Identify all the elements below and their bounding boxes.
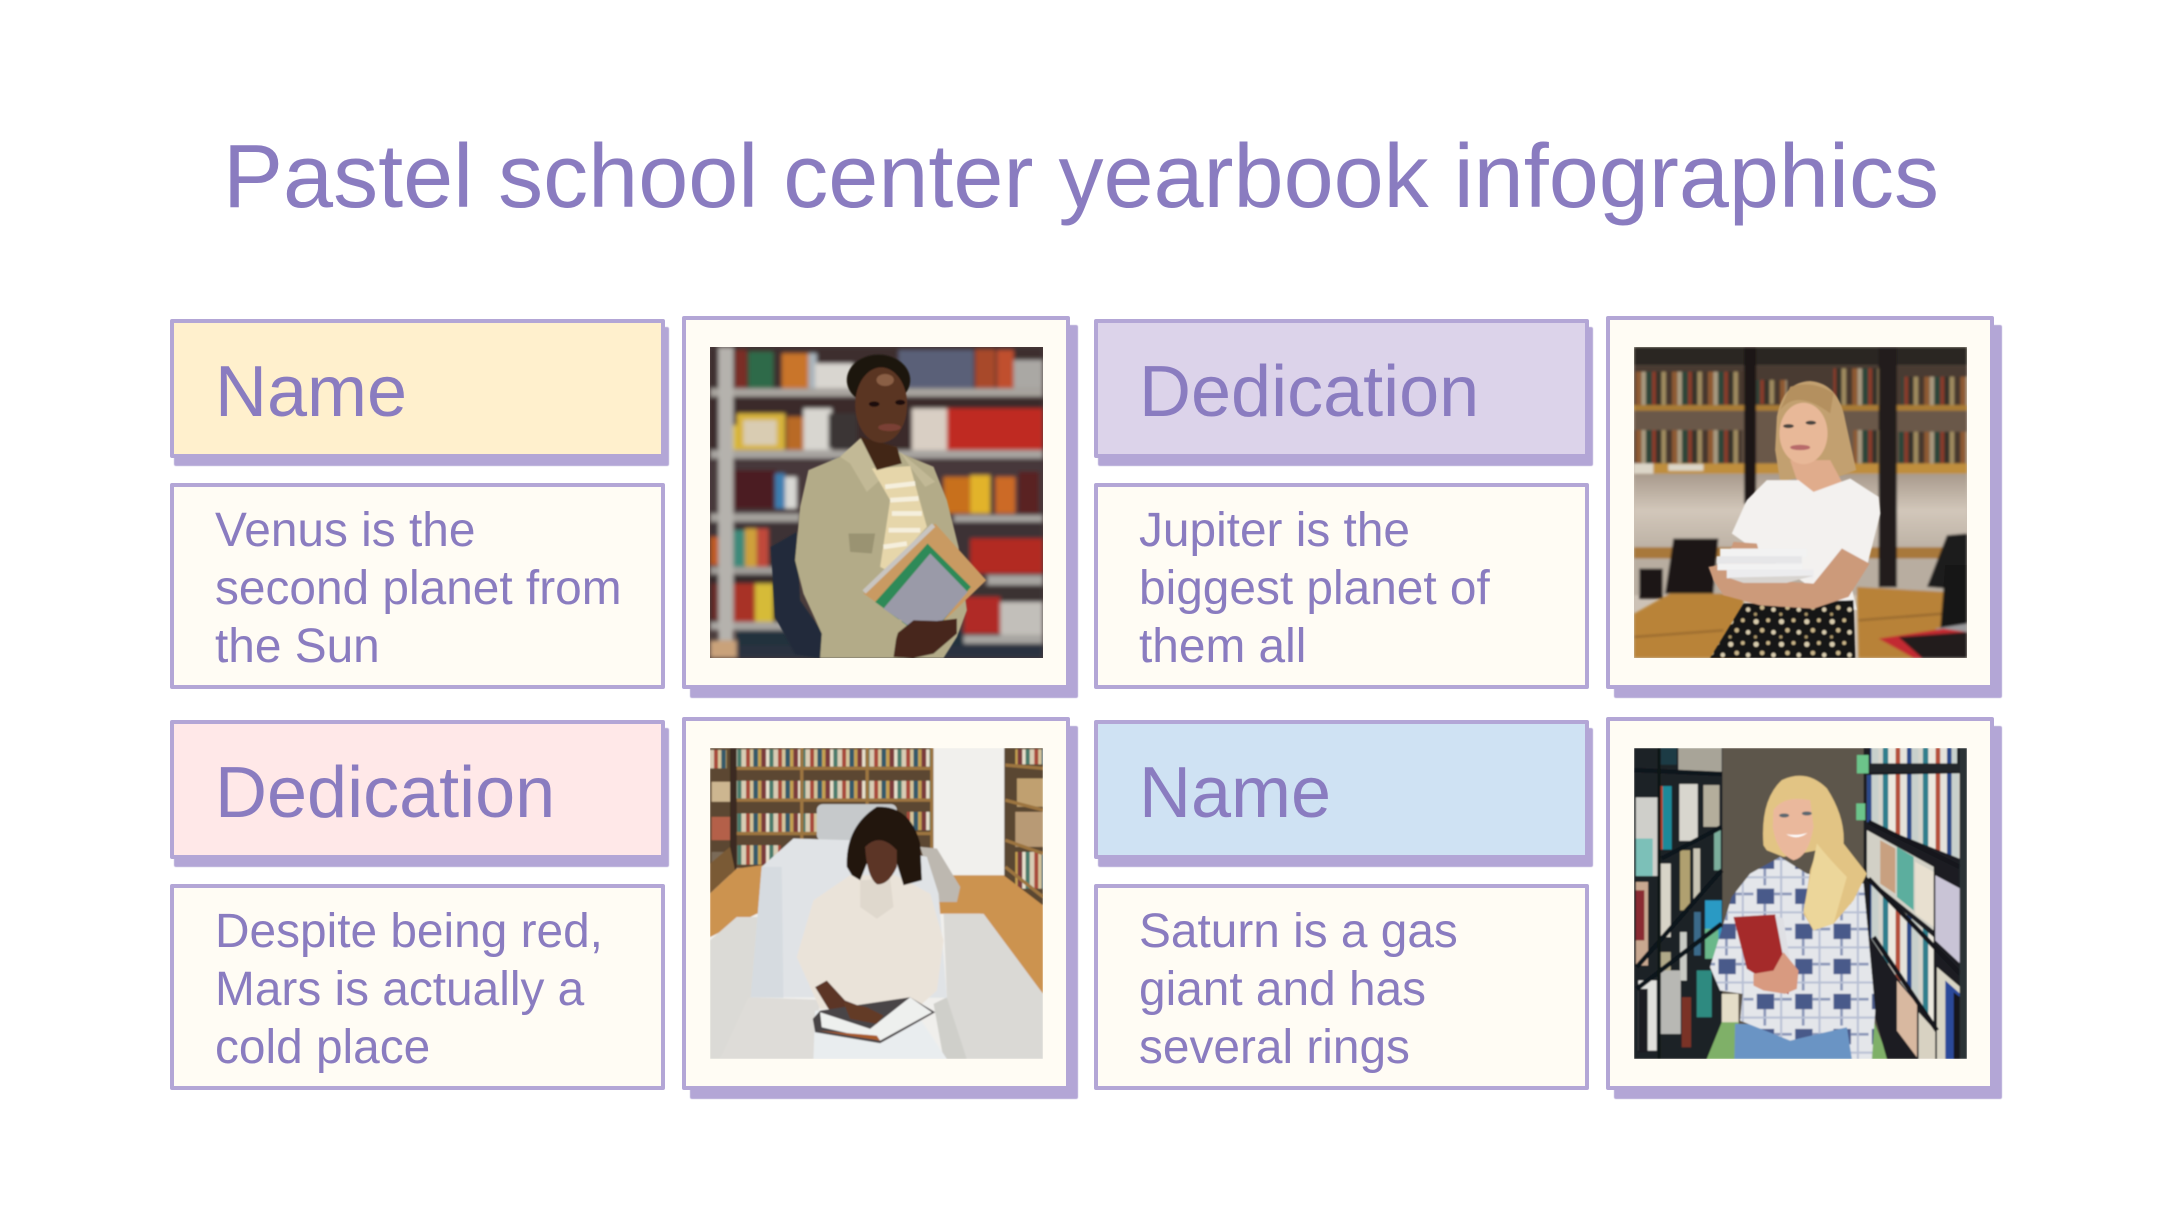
text block: Saturn: giant and has (1139, 963, 1426, 1016)
text block: Mars: cold place (215, 1021, 430, 1074)
text block: Jupiter (1094, 483, 1589, 689)
text block: Mars (170, 884, 665, 1090)
panel: top-right student (1094, 316, 2002, 698)
text block: Venus: the Sun (215, 620, 380, 673)
text block: Venus: Venus is the (215, 504, 475, 557)
text block: Saturn (1094, 884, 1589, 1090)
heading: Dedication (1094, 319, 1589, 458)
text block: Venus (170, 483, 665, 689)
text block: Jupiter: Jupiter is the (1139, 504, 1410, 557)
text block: Mars: Mars is actually a (215, 963, 584, 1016)
heading: Dedication: Dedication (215, 753, 555, 833)
photo frame: student with stack of books (1606, 316, 1994, 689)
heading: Dedication: Dedication (1139, 352, 1479, 432)
photo frame: student between bookshelves (1606, 717, 1994, 1090)
text block: Saturn: Saturn is a gas (1139, 905, 1458, 958)
text block: Saturn: several rings (1139, 1021, 1410, 1074)
panel: bottom-right student (1094, 717, 2002, 1100)
text block: Mars: Despite being red, (215, 905, 603, 958)
photo frame: student reading on sofa (682, 717, 1070, 1090)
text block: Venus: second planet from (215, 562, 622, 615)
heading: Name: Name (1139, 753, 1331, 833)
photo frame: student with folders (682, 316, 1070, 689)
heading: Name: Name (215, 352, 407, 432)
title: Pastel school center yearbook infographics (223, 127, 1939, 227)
heading: Name (170, 319, 665, 458)
heading: Name (1094, 720, 1589, 859)
heading: Dedication (170, 720, 665, 859)
panel: top-left student (170, 316, 1078, 698)
text block: Jupiter: them all (1139, 620, 1306, 673)
text block: Jupiter: biggest planet of (1139, 562, 1490, 615)
panel: bottom-left student (170, 717, 1078, 1100)
